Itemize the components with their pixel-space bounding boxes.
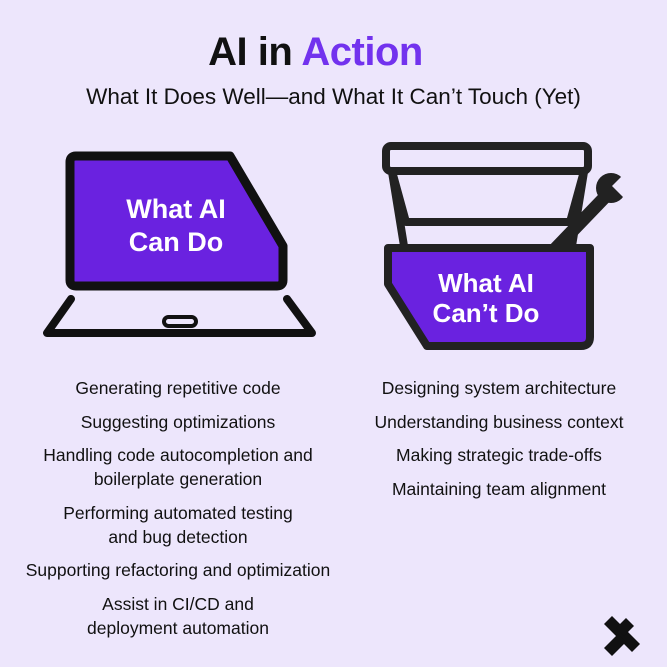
list: can do: deployment automation [87,618,269,638]
list: can do: Assist in CI/CD and [102,594,254,614]
list: can do: and bug detection [108,526,248,546]
list: can't do: Designing system architecture [382,378,616,398]
list: can't do: Making strategic trade-offs [396,445,602,465]
list: can do: Supporting refactoring and optimization [26,560,330,580]
icon: logo [604,616,640,656]
list: can do: Performing automated testing [63,502,293,522]
icon: toolbox: What AI [438,268,534,298]
icon: laptop: What AI [126,194,226,224]
title: AI in Action [208,30,423,74]
list: can do: Generating repetitive code [75,378,281,398]
list: can do [26,378,330,638]
icon: laptop: Can Do [129,227,223,257]
icon: toolbox: Can’t Do [433,298,539,328]
list: can do: Suggesting optimizations [81,412,275,432]
subtitle: What It Does Well—and What It Can’t Touch (Yet) [86,84,581,109]
list: can't do [374,378,624,498]
list: can do: Handling code autocompletion and [43,445,313,465]
list: can do: boilerplate generation [94,469,262,489]
list: can't do: Maintaining team alignment [392,478,606,498]
list: can't do: Understanding business context [374,412,624,432]
